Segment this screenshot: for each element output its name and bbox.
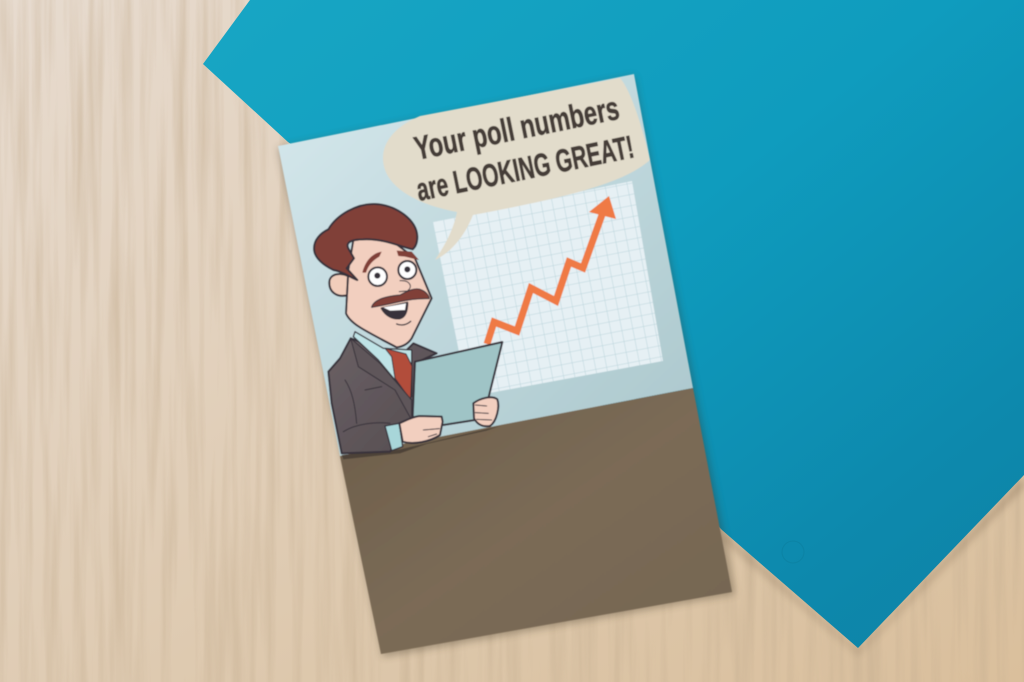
jacket sleeve lines [343, 380, 390, 432]
greeting card [278, 74, 732, 654]
teal paper envelope [203, 0, 1024, 648]
tie [385, 348, 412, 400]
lapel [351, 338, 412, 420]
ear [329, 274, 350, 296]
hair [314, 204, 417, 280]
speech text: are LOOKING GREAT! [413, 129, 637, 208]
shirt collar [353, 332, 412, 397]
suit jacket [328, 338, 437, 453]
desk contact shadow [342, 426, 500, 459]
speech text [411, 89, 637, 208]
chart paper with grid [433, 181, 663, 397]
chin [397, 321, 411, 325]
speech bubble [383, 78, 650, 260]
mouth [382, 303, 407, 319]
right hand [473, 397, 498, 426]
card shadow [278, 76, 735, 657]
moustache [372, 289, 429, 307]
shadow of teal paper [722, 478, 1024, 654]
tablet [413, 342, 502, 425]
eyebrows [362, 252, 382, 273]
head [346, 237, 432, 347]
shirt cuff [385, 423, 403, 451]
desk [340, 388, 732, 654]
eyes [368, 267, 387, 286]
nose [399, 281, 410, 292]
left hand [399, 416, 443, 443]
card background [278, 74, 693, 456]
cartoon man [314, 204, 502, 459]
rising orange arrow [487, 196, 616, 344]
speech text: Your poll numbers [411, 89, 622, 167]
